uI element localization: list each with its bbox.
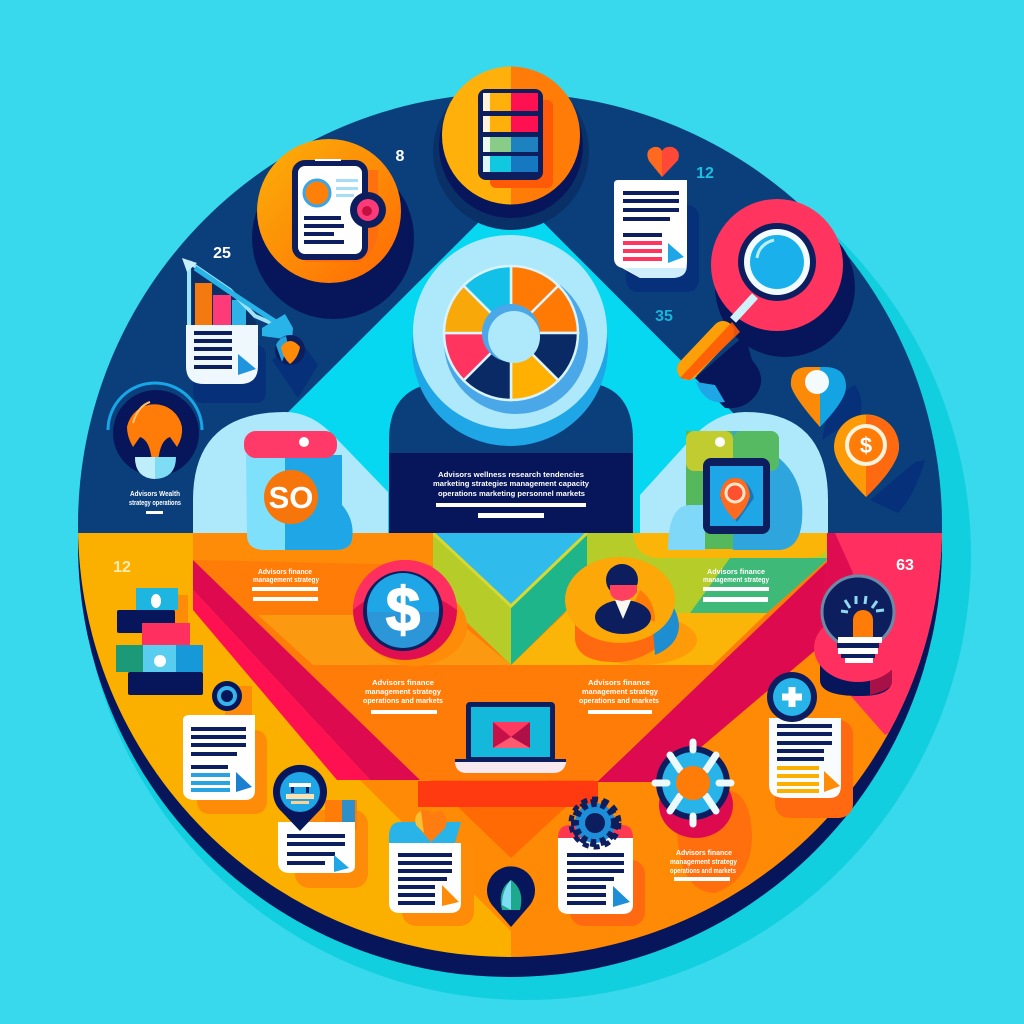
top orange circle with table [433, 60, 589, 230]
label 35: 35 [655, 308, 673, 325]
bulb caption: strategy operations [129, 498, 181, 507]
left arch calendar with SO badge [244, 431, 353, 550]
document card [295, 163, 365, 257]
middle left caption [363, 678, 443, 714]
left caption: Advisors finance [258, 567, 312, 576]
handle [733, 296, 755, 320]
document with plus [767, 672, 853, 818]
wheel icon [655, 742, 752, 893]
middle right caption: operations and markets [579, 696, 659, 705]
central blue V [433, 533, 587, 606]
lightbulb right [814, 576, 902, 696]
document with heart top right [614, 147, 699, 292]
small ring [212, 681, 252, 726]
pink badge [350, 192, 386, 228]
middle right caption [579, 678, 659, 714]
orange top band left [193, 533, 433, 565]
cyan central triangle [288, 222, 734, 533]
bars [195, 283, 212, 325]
document shadow [305, 170, 378, 262]
dollar coin [353, 560, 467, 666]
left orange circle with document [252, 139, 414, 319]
stack of blocks [116, 588, 203, 695]
central trapezoid [193, 560, 827, 780]
map pin [720, 478, 754, 522]
panel: upper navy half [70, 90, 950, 533]
plus badge [767, 672, 817, 722]
disk navy rim [78, 113, 942, 977]
pin with dollar: $ [860, 433, 872, 458]
middle right caption: management strategy [582, 687, 659, 696]
olive upper right block [565, 533, 827, 613]
middle left caption: Advisors finance [372, 678, 434, 687]
dollar coin: $ [386, 576, 420, 645]
lower right caption: Advisors finance [676, 848, 732, 857]
label 8: 8 [396, 148, 405, 165]
left crimson stripe [193, 560, 420, 780]
panel: lower coloured half [70, 533, 951, 973]
middle left caption: management strategy [365, 687, 442, 696]
right arch tablet with pin [668, 431, 802, 550]
red bar [418, 781, 598, 807]
pedestal text: Advisors wellness research tendencies [438, 470, 584, 479]
left caption: management strategy [253, 575, 320, 584]
panel: right light arch [640, 412, 828, 533]
green chevron side [511, 533, 587, 665]
orange right sector [511, 533, 951, 973]
disk shadow [81, 110, 971, 1000]
small pin [272, 340, 318, 398]
lower right caption: management strategy [670, 857, 738, 866]
light orange mid band [258, 615, 511, 665]
document [186, 325, 258, 384]
pedestal text [433, 470, 590, 518]
document lower with gear [558, 799, 645, 926]
yellow top band right [633, 533, 827, 558]
pin with dollar [834, 414, 925, 513]
panel: left light arch [193, 412, 388, 533]
red right sector [815, 533, 950, 735]
pie sectors [444, 266, 578, 400]
label 12 left: 12 [113, 559, 131, 576]
pin [273, 765, 327, 831]
middle left caption: operations and markets [363, 696, 443, 705]
arrow [189, 262, 283, 328]
olive chevron side [433, 533, 511, 665]
right crimson stripe [597, 562, 827, 782]
tablet [703, 458, 770, 534]
gear [575, 803, 615, 843]
magnifier icon [680, 199, 855, 408]
document lower centre with heart [389, 810, 474, 926]
pedestal text: marketing strategies management capacity [433, 479, 590, 488]
left caption [252, 567, 320, 601]
bulb caption [129, 489, 181, 514]
middle right caption: Advisors finance [588, 678, 650, 687]
laptop icon [455, 702, 566, 773]
central pie ring [412, 235, 608, 446]
lower right caption: operations and markets [670, 866, 736, 875]
chart document icon [182, 258, 318, 403]
bottom pin [487, 866, 535, 927]
right caption [703, 567, 770, 602]
document lower left 2 with pin [273, 765, 368, 888]
pin with white dot [791, 367, 862, 440]
label 25: 25 [213, 245, 231, 262]
person icon [565, 557, 697, 665]
label 63: 63 [896, 557, 914, 574]
right caption: Advisors finance [707, 567, 765, 576]
person [595, 600, 651, 634]
table icon [478, 89, 543, 180]
right caption: management strategy [703, 575, 770, 584]
document lower left 1 [183, 715, 267, 814]
yellow floor right [511, 613, 767, 665]
label 12 top right: 12 [696, 165, 714, 182]
heart [647, 147, 679, 177]
pedestal [389, 385, 633, 533]
pedestal text: operations marketing personnel markets [438, 489, 585, 498]
bulb icon left [108, 383, 202, 514]
lower right caption [670, 848, 738, 881]
bulb caption: Advisors Wealth [130, 489, 180, 498]
left arch calendar with SO badge: SO [269, 480, 313, 515]
central lower wedge [360, 780, 511, 931]
yellow left sector [70, 533, 511, 973]
SO badge [267, 471, 321, 525]
